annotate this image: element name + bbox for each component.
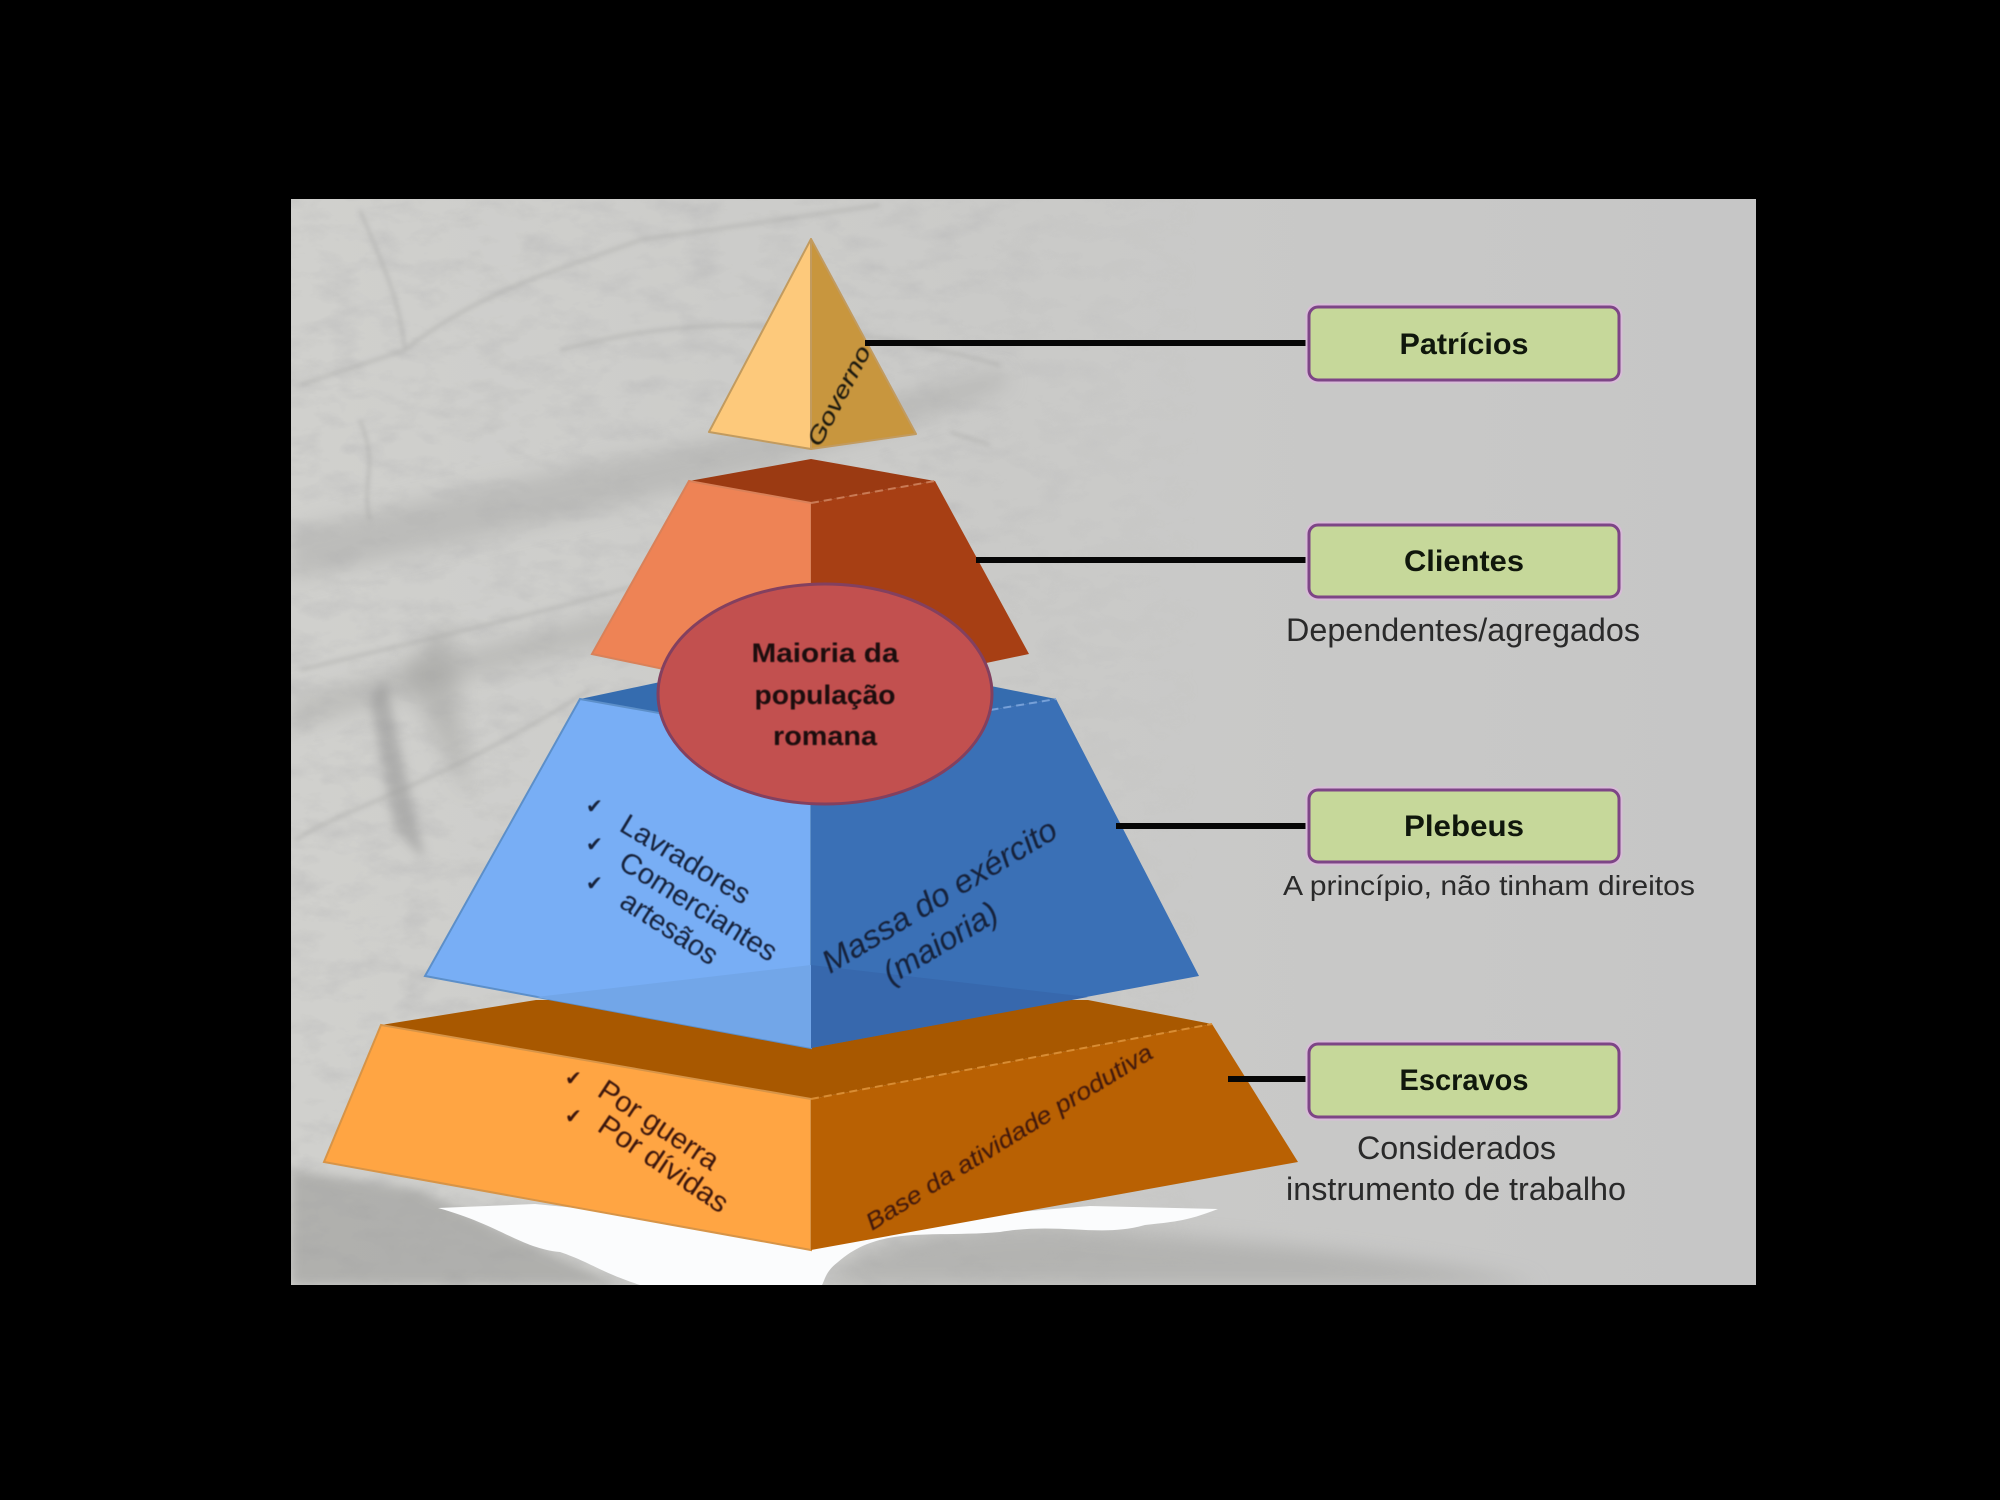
label: Patrícios: Patrícios bbox=[1400, 328, 1528, 361]
text: plebeus occupations: ✔ bbox=[586, 834, 603, 856]
oval: Maioria da população romana: romana bbox=[773, 721, 878, 751]
text: plebeus occupations: Comerciantes bbox=[613, 846, 783, 968]
caption: Considerados instrumento de trabalho: Considerados bbox=[1357, 1130, 1556, 1166]
oval: Maioria da população romana bbox=[658, 584, 992, 804]
text: escravos origins: ✔ bbox=[565, 1106, 582, 1128]
text: escravos origins: Por dívidas bbox=[592, 1109, 734, 1220]
text: plebeus occupations: ✔ bbox=[586, 796, 603, 818]
text: Base da atividade produtiva: Base da atividade produtiva bbox=[861, 1039, 1158, 1236]
connector: Clientes bbox=[976, 557, 1311, 563]
text: Massa do exército (maioria): Massa do exército bbox=[815, 811, 1063, 980]
tier: top pyramid bbox=[709, 239, 916, 449]
tier: blue bbox=[425, 650, 1199, 1048]
text: plebeus occupations: ✔ bbox=[586, 873, 603, 895]
text: escravos origins: ✔ bbox=[565, 1068, 582, 1090]
label: Patrícios bbox=[1309, 307, 1619, 380]
panel: background wall bbox=[291, 199, 1756, 1285]
text: plebeus occupations: artesãos bbox=[614, 885, 724, 972]
text: escravos origins bbox=[565, 1068, 734, 1220]
text: Governo: Governo bbox=[801, 341, 876, 450]
connector: Plebeus bbox=[1116, 823, 1311, 829]
label: Clientes: Clientes bbox=[1404, 545, 1524, 578]
label: Clientes bbox=[1309, 525, 1619, 597]
tier: red bbox=[592, 459, 1029, 700]
label: Plebeus bbox=[1309, 790, 1619, 862]
label: Escravos bbox=[1309, 1044, 1619, 1117]
caption: Considerados instrumento de trabalho: instrumento de trabalho bbox=[1286, 1171, 1626, 1207]
label: Escravos: Escravos bbox=[1400, 1064, 1528, 1097]
caption: Dependentes/agregados: Dependentes/agregados bbox=[1286, 612, 1640, 648]
label: Plebeus: Plebeus bbox=[1404, 810, 1524, 843]
tier: orange base bbox=[324, 1000, 1298, 1250]
oval: Maioria da população romana: Maioria da bbox=[752, 638, 900, 668]
connector: Patrícios bbox=[865, 340, 1311, 346]
caption: Considerados instrumento de trabalho bbox=[1286, 1130, 1626, 1207]
caption: A princípio, não tinham direitos: A princípio, não tinham direitos bbox=[1283, 870, 1695, 901]
connector: Escravos bbox=[1228, 1076, 1311, 1082]
pyramid bbox=[324, 239, 1298, 1250]
text: plebeus occupations bbox=[586, 796, 783, 972]
text: plebeus occupations: Lavradores bbox=[614, 809, 756, 911]
text: escravos origins: Por guerra bbox=[592, 1074, 726, 1177]
text: Massa do exército (maioria): (maioria) bbox=[876, 894, 1004, 991]
oval: Maioria da população romana: população bbox=[754, 680, 896, 710]
torn white paper bbox=[438, 1204, 1218, 1285]
